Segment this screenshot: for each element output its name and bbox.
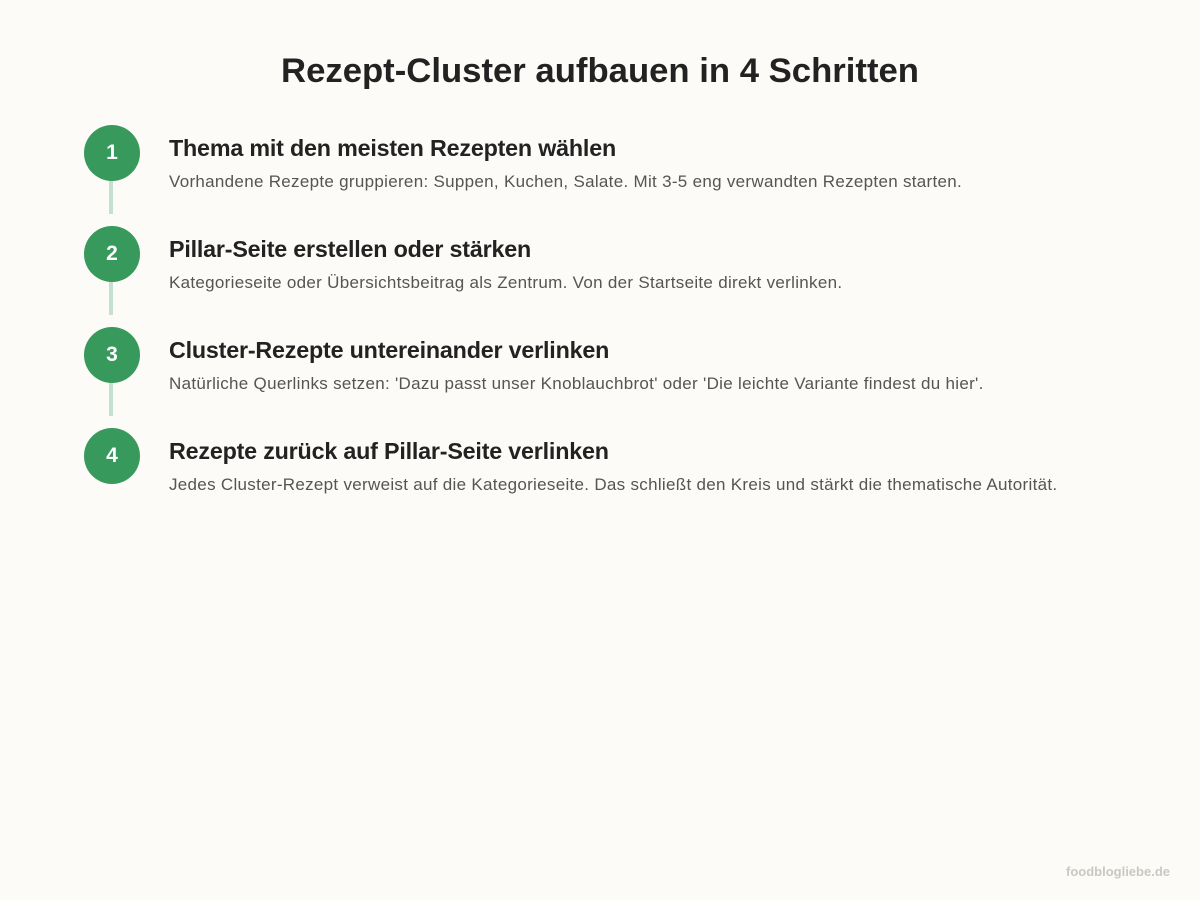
step 3: 3 (106, 343, 118, 366)
connector 3 (109, 382, 113, 416)
step 3 (84, 327, 984, 393)
footer credit: foodblogliebe.de (1066, 864, 1170, 879)
step 4: Jedes Cluster-Rezept verweist auf die Kategorieseite. Das schließt den Kreis und stärkt die thematische Autorität. (169, 475, 1057, 494)
step 4: Rezepte zurück auf Pillar-Seite verlinken (169, 438, 609, 464)
step 1: Thema mit den meisten Rezepten wählen (169, 135, 616, 161)
step 2 (84, 226, 842, 292)
step 4 (84, 428, 1057, 494)
step 2: 2 (106, 242, 118, 265)
connector 2 (109, 281, 113, 315)
title: Rezept-Cluster aufbauen in 4 Schritten (281, 52, 919, 90)
step 1: 1 (106, 141, 118, 164)
step 3: Natürliche Querlinks setzen: 'Dazu passt unser Knoblauchbrot' oder 'Die leichte Variante findest du hier'. (169, 374, 984, 393)
step 1: Vorhandene Rezepte gruppieren: Suppen, Kuchen, Salate. Mit 3-5 eng verwandten Rezepten starten. (169, 172, 962, 191)
step 3: Cluster-Rezepte untereinander verlinken (169, 337, 609, 363)
step 1 (84, 125, 962, 191)
step 2: Kategorieseite oder Übersichtsbeitrag als Zentrum. Von der Startseite direkt verlinken. (169, 273, 842, 292)
step 4: 4 (106, 444, 118, 467)
connector 1 (109, 180, 113, 214)
step 2: Pillar-Seite erstellen oder stärken (169, 236, 531, 262)
